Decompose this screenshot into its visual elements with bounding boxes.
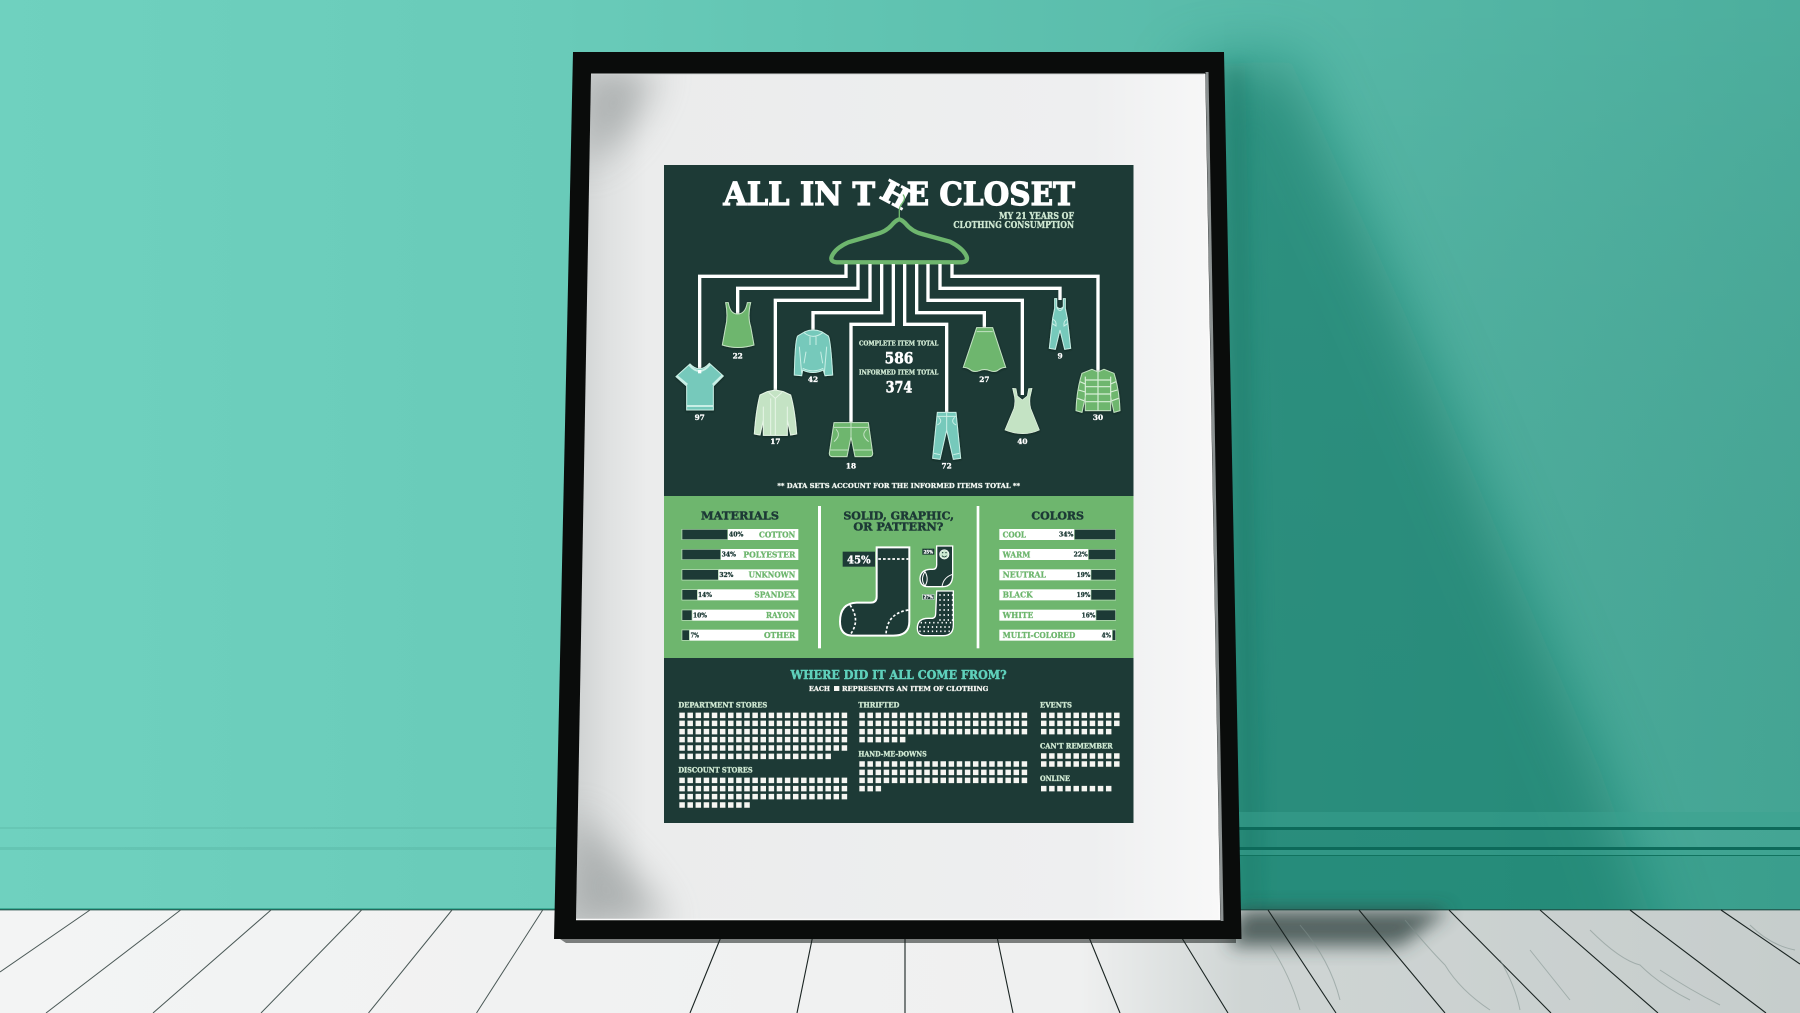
group: online <box>1040 774 1112 789</box>
bottom section: where it came from <box>678 667 1120 805</box>
garment: jeans <box>933 412 961 459</box>
garment: skirt <box>963 328 1006 372</box>
subtitle: MY 21 YEARS OF <box>999 212 1075 222</box>
title: H <box>875 173 916 217</box>
garment: overalls <box>1049 299 1071 349</box>
title: ALL IN T <box>722 175 875 213</box>
label 30: 30 <box>1093 413 1103 422</box>
color bars <box>999 529 1116 641</box>
material bars: 7% <box>691 632 699 639</box>
material bars: COTTON <box>759 530 795 540</box>
garment: shorts <box>829 423 873 457</box>
label 42: 42 <box>808 375 818 384</box>
label 22: 22 <box>733 351 743 360</box>
hanger <box>831 195 967 262</box>
group: discount stores <box>678 766 848 805</box>
pattern heading <box>843 508 954 534</box>
label 9: 9 <box>1057 351 1063 360</box>
panel: colors <box>999 508 1116 641</box>
material bars <box>682 529 798 641</box>
color bars: NEUTRAL <box>1003 570 1046 580</box>
middle section: materials, prints, colors <box>682 506 1116 648</box>
total figures <box>859 341 939 396</box>
total figures: 374 <box>886 377 912 396</box>
picture frame <box>554 52 1242 943</box>
materials heading: MATERIALS <box>701 508 779 522</box>
material bars: 10% <box>693 612 707 619</box>
color bars: MULTI-COLORED <box>1003 631 1076 641</box>
garment: cardigan <box>754 390 797 435</box>
group: can't remember: CAN'T REMEMBER <box>1040 741 1113 750</box>
group: hand-me-downs <box>858 749 1028 789</box>
title: E CLOSET <box>907 175 1075 213</box>
total figures: INFORMED ITEM TOTAL <box>859 369 939 376</box>
skirting board left <box>0 827 560 910</box>
footnote: ** DATA SETS ACCOUNT FOR THE INFORMED ITEMS TOTAL ** <box>777 482 1021 490</box>
legend: REPRESENTS AN ITEM OF CLOTHING <box>842 685 989 693</box>
color bars: 22% <box>1074 552 1088 559</box>
panel: materials <box>682 508 798 641</box>
wood grain <box>1270 920 1795 1010</box>
group: can't remember <box>1040 741 1120 764</box>
group: events <box>1040 701 1120 732</box>
group: department stores: DEPARTMENT STORES <box>678 701 767 710</box>
color bars: COOL <box>1003 530 1026 540</box>
connector lines <box>700 264 1098 425</box>
subtitle <box>953 212 1075 231</box>
color bars: WARM <box>1002 550 1031 560</box>
garment: hoodie <box>794 330 833 376</box>
big sock 45%: 45% <box>847 553 871 566</box>
section heading: WHERE DID IT ALL COME FROM? <box>790 667 1007 682</box>
color bars: 34% <box>1059 532 1073 539</box>
material bars: UNKNOWN <box>749 571 795 581</box>
colors heading: COLORS <box>1031 508 1084 522</box>
color bars: 19% <box>1077 592 1090 599</box>
garment: tank top <box>722 303 754 347</box>
floor plank lines right <box>690 910 1800 1013</box>
total figures: COMPLETE ITEM TOTAL <box>859 341 939 348</box>
color bars: 19% <box>1077 572 1090 579</box>
material bars: 34% <box>722 552 736 559</box>
subtitle: CLOTHING CONSUMPTION <box>953 221 1074 231</box>
group: department stores <box>678 701 848 756</box>
color bars: BLACK <box>1003 590 1033 600</box>
material bars: 32% <box>719 572 733 579</box>
label 18: 18 <box>846 462 856 471</box>
garment: puffer jacket <box>1076 369 1120 412</box>
color bars: WHITE <box>1002 611 1034 621</box>
poster <box>664 165 1134 823</box>
poster bottom panel <box>664 658 1134 823</box>
material bars: POLYESTER <box>743 550 796 560</box>
top section: closet diagram <box>676 173 1120 490</box>
floor plank lines left <box>0 910 543 1013</box>
color bars: 4% <box>1102 632 1111 639</box>
material bars: SPANDEX <box>754 591 796 601</box>
group: online: ONLINE <box>1040 774 1070 783</box>
label 27: 27 <box>979 375 989 384</box>
total figures: 586 <box>885 349 913 368</box>
label 72: 72 <box>942 462 952 471</box>
garment: t-shirt <box>676 363 723 410</box>
label 17: 17 <box>770 437 780 446</box>
color bars: 16% <box>1082 612 1095 619</box>
poster green band <box>664 496 1134 658</box>
frame shadow on wall <box>1190 60 1680 1000</box>
material bars: RAYON <box>766 611 795 621</box>
material bars: 14% <box>698 592 712 599</box>
group: hand-me-downs: HAND-ME-DOWNS <box>858 749 927 758</box>
group: thrifted: THRIFTED <box>858 701 899 710</box>
mat board <box>570 70 1222 925</box>
material bars: OTHER <box>764 631 796 641</box>
panel: solid, graphic or pattern <box>840 508 954 636</box>
pattern heading: OR PATTERN? <box>853 520 944 534</box>
title <box>722 173 1075 217</box>
group: discount stores: DISCOUNT STORES <box>678 766 753 775</box>
legend: EACH <box>809 685 830 693</box>
panel dividers <box>818 506 979 648</box>
pattern sock 27%: 27% <box>924 596 933 601</box>
pattern heading: SOLID, GRAPHIC, <box>843 508 954 522</box>
poster top panel <box>664 165 1134 496</box>
group: thrifted <box>858 701 1028 740</box>
group: events: EVENTS <box>1040 701 1072 710</box>
material bars: 40% <box>729 532 743 539</box>
graphic sock 25%: 25% <box>924 549 933 555</box>
floor <box>0 909 1800 1013</box>
label 40: 40 <box>1017 437 1027 446</box>
garment: dress <box>1005 388 1039 434</box>
skirting board right <box>1238 812 1800 910</box>
label 97: 97 <box>695 413 705 422</box>
